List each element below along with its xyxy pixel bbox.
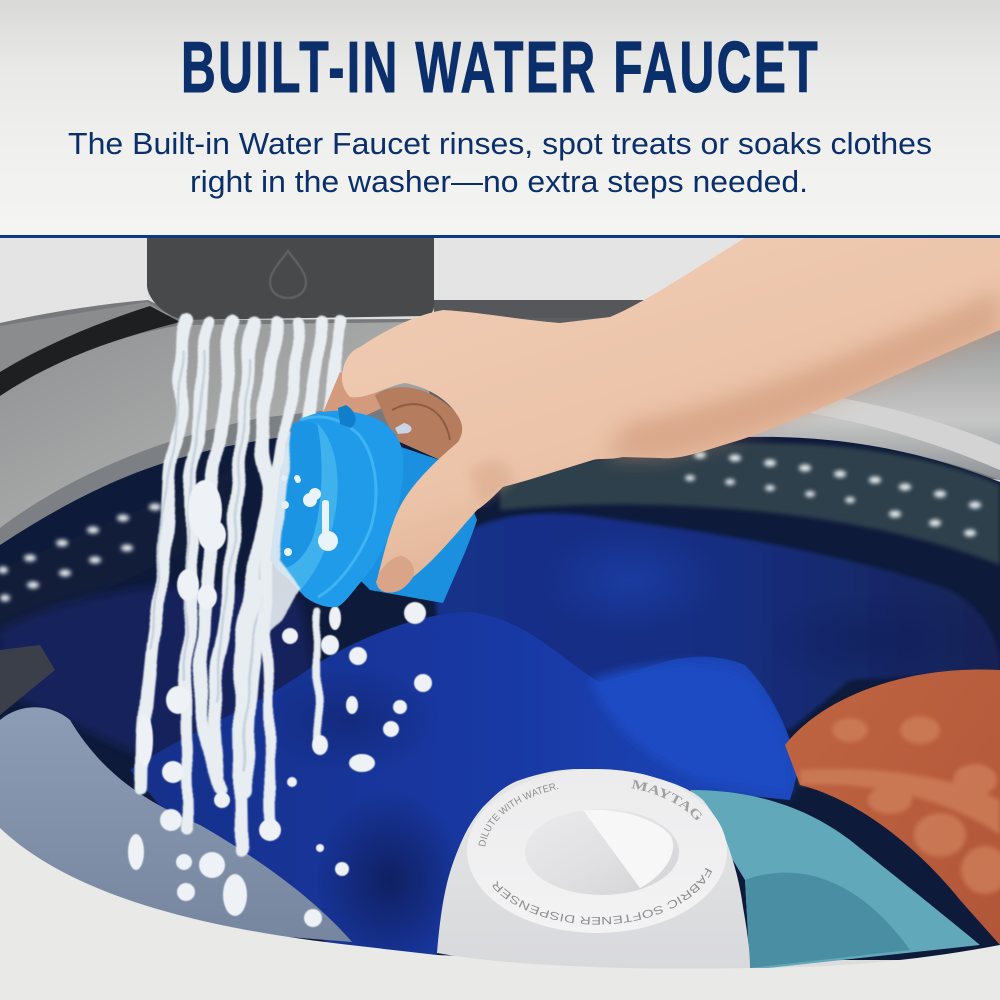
icon: fabric softener dispenser: MAYTAG — [631, 780, 702, 820]
subtitle line 1: The Built-in Water Faucet rinses, spot treats or soaks clothes — [68, 127, 932, 161]
subtitle line 2: right in the washer—no extra steps needed. — [190, 165, 808, 199]
drum perforations — [0, 452, 981, 602]
clothes: left navy — [0, 586, 320, 760]
splash over cup edge — [255, 430, 300, 640]
right rim — [640, 330, 1000, 480]
drum band — [500, 443, 1000, 565]
chart: water streams — [143, 322, 342, 850]
clothes: grey blue left — [0, 707, 352, 942]
clothes: dark corner cloth — [0, 645, 55, 715]
clothes: orange — [785, 670, 1000, 945]
front lid edge — [0, 828, 1000, 1000]
washer back wall — [0, 238, 760, 323]
clothes: teal — [690, 790, 980, 970]
icon: faucet housing — [147, 238, 434, 320]
icon: fabric softener dispenser: FABRIC SOFTENER DISPENSER — [492, 868, 712, 925]
icon: hand and arm — [342, 238, 1000, 592]
cup opening — [274, 421, 322, 568]
icon: fingers behind the cup — [322, 372, 470, 470]
icon: fabric softener dispenser: DILUTE WITH WATER. — [478, 783, 558, 846]
icon: fabric softener dispenser — [437, 769, 750, 968]
panel: washer photo — [0, 236, 1000, 1000]
panel: header background — [0, 0, 1000, 238]
grey rim — [0, 300, 1000, 545]
thumbnail — [377, 556, 414, 592]
tub interior — [0, 432, 1000, 960]
clothes: royal blue — [130, 612, 797, 955]
icon: water droplets — [128, 480, 432, 927]
cup rim — [270, 411, 403, 607]
icon: blue detergent cup — [270, 405, 477, 607]
clothes: navy back — [430, 513, 1000, 730]
cup body — [340, 445, 477, 603]
